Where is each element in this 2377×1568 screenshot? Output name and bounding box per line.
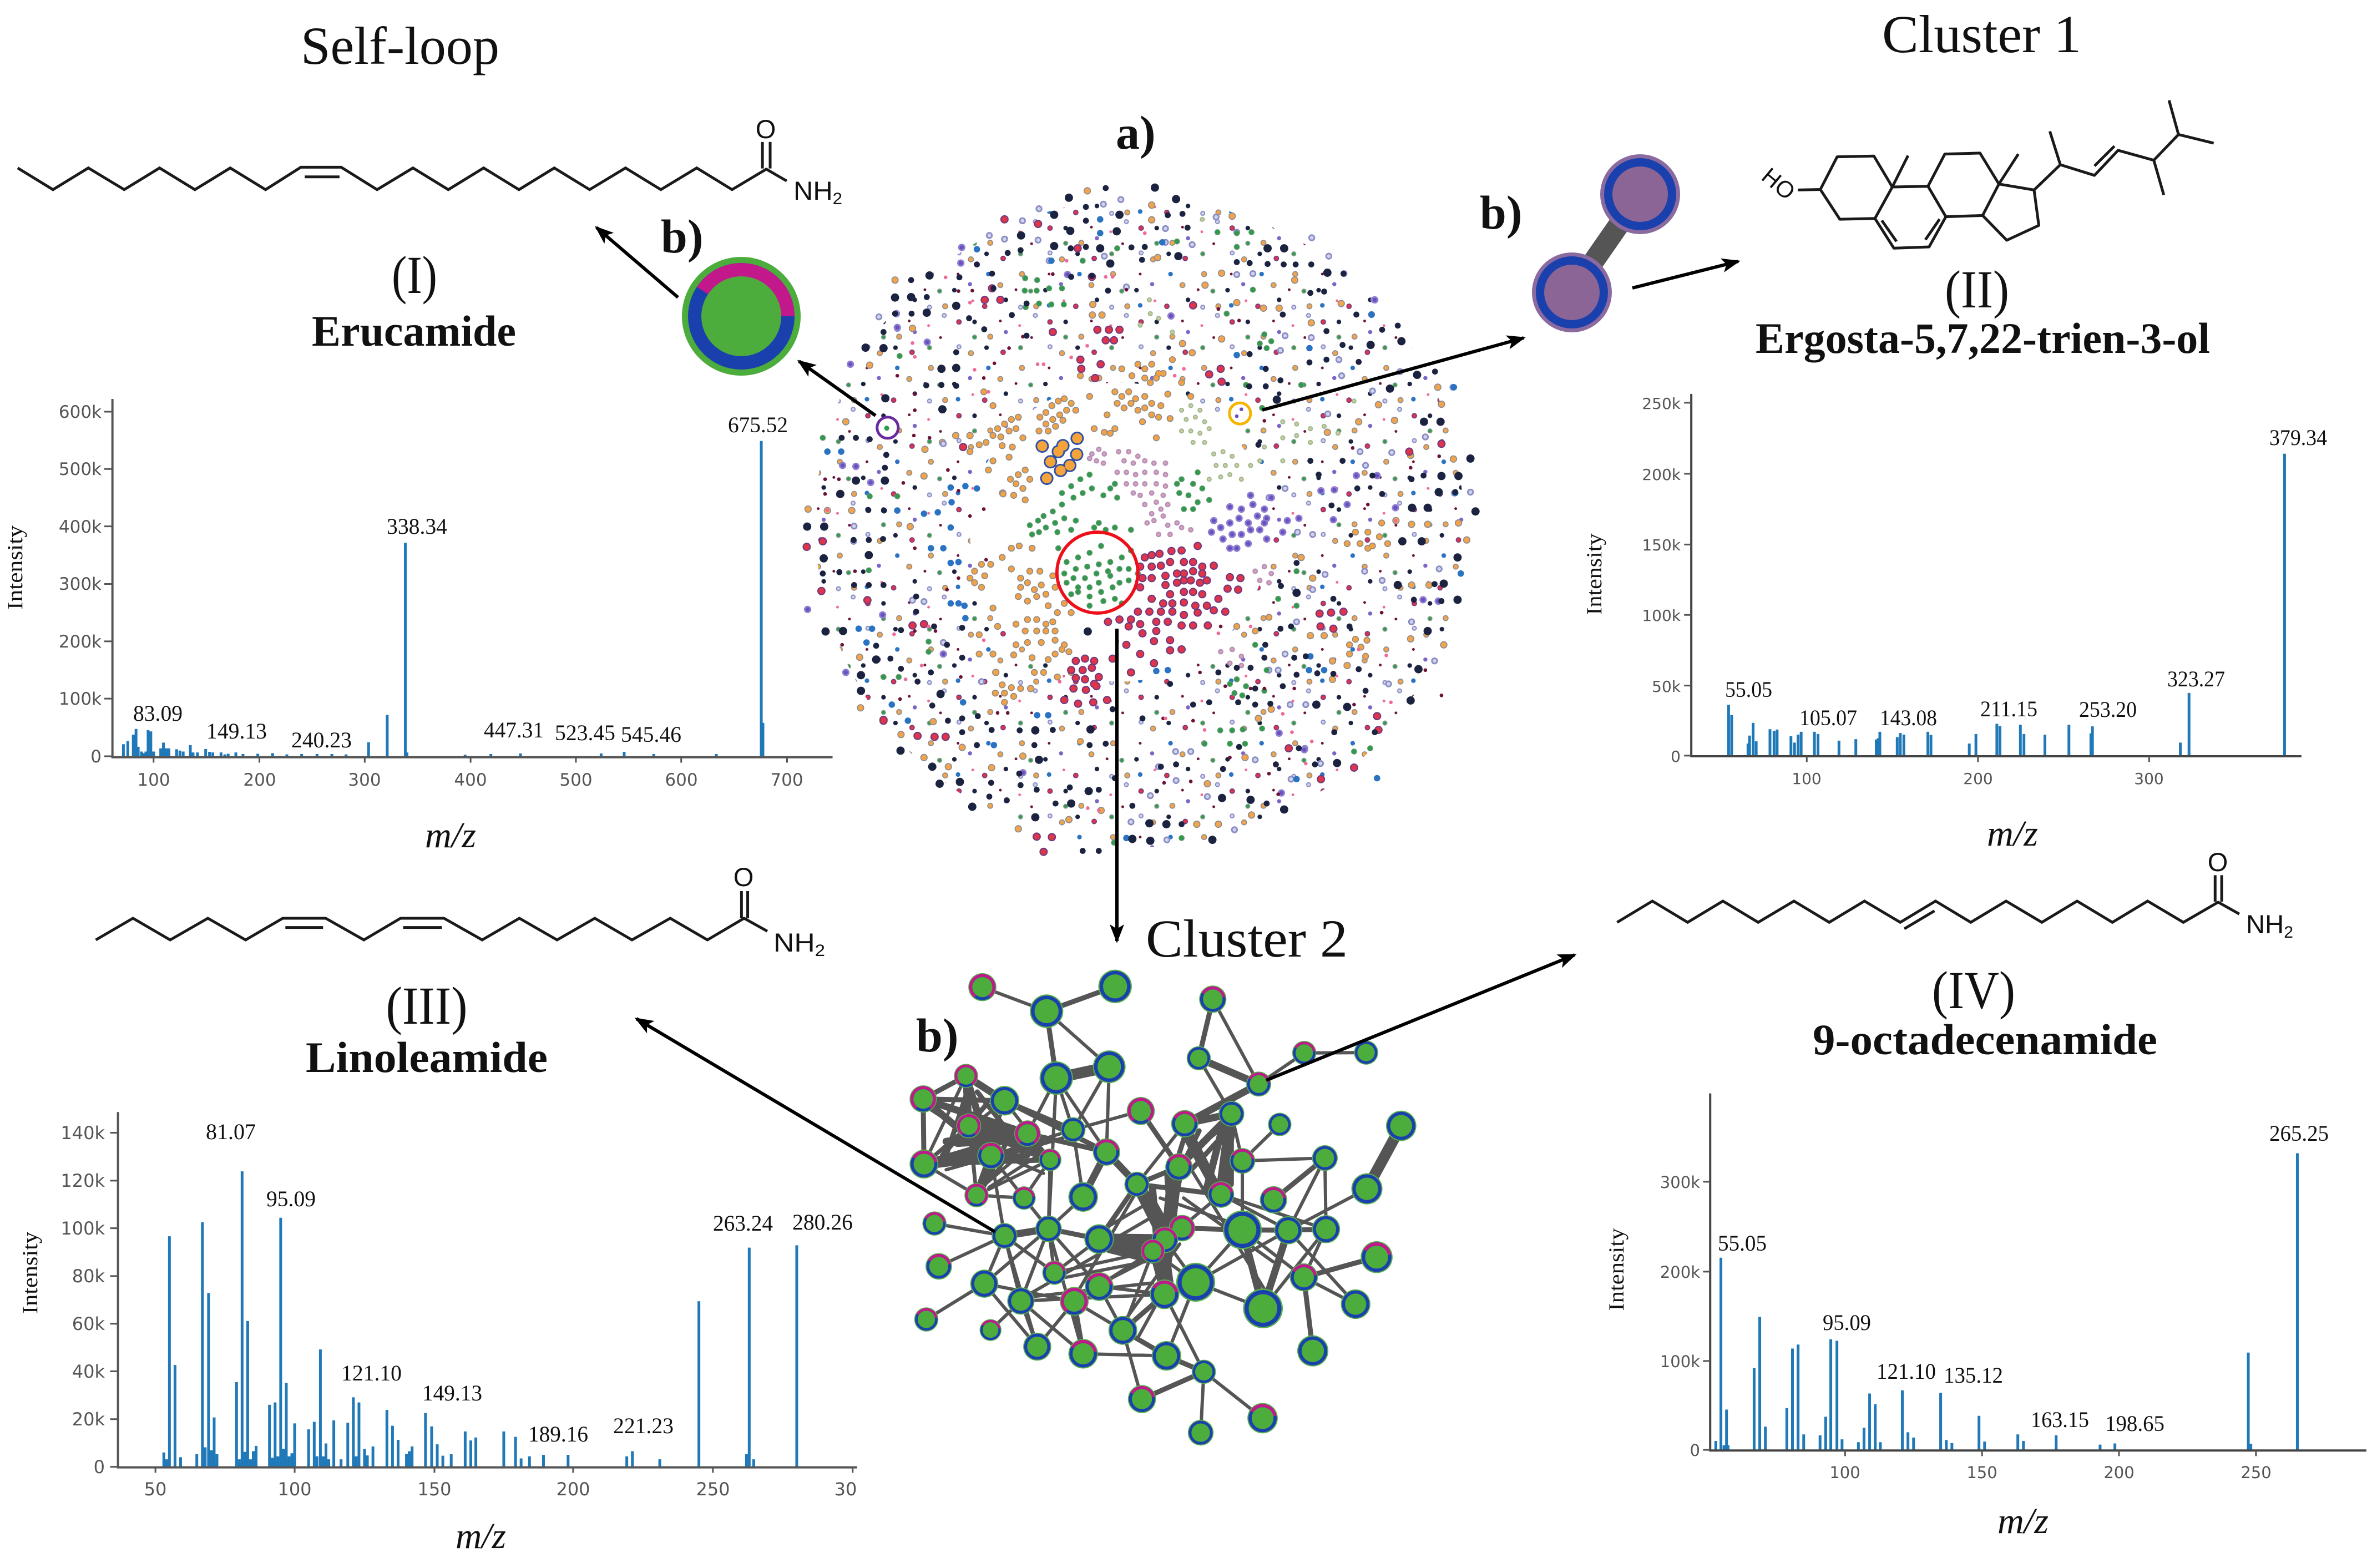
chart IV: 9-octadecenamide spectrum: 265.25	[2269, 1121, 2329, 1146]
chart II: ergosta spectrum: 105.07	[1799, 705, 1857, 730]
chart II: ergosta spectrum: 253.20	[2079, 697, 2137, 722]
chart I: erucamide spectrum: 400k	[59, 517, 102, 537]
molecule I: erucamide structure: 2	[833, 190, 842, 208]
node pair: cluster 1 enlarged	[1532, 154, 1680, 332]
chart II: ergosta spectrum: 50k	[1652, 677, 1681, 696]
molecule I: erucamide structure	[18, 114, 842, 208]
arrow: cluster 1 pair to ergosta	[1632, 261, 1738, 288]
label b) cluster 1: b)	[1480, 186, 1522, 239]
chart III: linoleamide spectrum: 120k	[60, 1170, 105, 1191]
chart II: ergosta spectrum: 0	[1671, 747, 1681, 766]
chart I: erucamide spectrum: 447.31	[484, 717, 544, 742]
chart IV: 9-octadecenamide spectrum: 100k	[1660, 1352, 1700, 1371]
chart III: linoleamide spectrum: 140k	[60, 1122, 105, 1144]
heading: Cluster 2: Cluster 2	[1146, 909, 1348, 968]
chart IV: 9-octadecenamide spectrum: 200k	[1660, 1263, 1700, 1282]
chart II: ergosta spectrum: 200	[1963, 770, 1993, 788]
compound number I: (I)	[392, 245, 437, 305]
compound number II: (II)	[1945, 260, 2009, 319]
chart I: erucamide spectrum: 400	[454, 770, 487, 790]
chart III: linoleamide spectrum: 40k	[72, 1361, 105, 1382]
chart I: erucamide spectrum: 523.45	[555, 720, 615, 745]
chart IV: 9-octadecenamide spectrum: m/z	[1997, 1501, 2049, 1541]
chart III: linoleamide spectrum: 263.24	[713, 1211, 773, 1236]
chart IV: 9-octadecenamide spectrum: Intensity	[1605, 1228, 1629, 1311]
chart I: erucamide spectrum: m/z	[425, 815, 476, 856]
molecule IV: 9-octadecenamide structure	[1617, 847, 2293, 942]
large orange nodes	[1042, 438, 1077, 478]
chart II: ergosta spectrum: 143.08	[1880, 705, 1937, 730]
chart III: linoleamide spectrum: 30	[835, 1479, 857, 1500]
chart IV: 9-octadecenamide spectrum: 55.05	[1718, 1231, 1767, 1256]
chart II: ergosta spectrum: 211.15	[1980, 696, 2037, 721]
chart III: linoleamide spectrum: 100	[277, 1479, 312, 1500]
molecule I: erucamide structure: NH	[793, 176, 831, 205]
navy large nodes	[807, 188, 1475, 841]
chart IV: 9-octadecenamide spectrum: 95.09	[1823, 1310, 1871, 1335]
chart IV: 9-octadecenamide spectrum: 300k	[1660, 1173, 1700, 1192]
chart I: erucamide spectrum: 500k	[59, 459, 102, 479]
chart I: erucamide spectrum: Intensity	[3, 525, 27, 610]
chart II: ergosta spectrum	[1582, 394, 2327, 854]
navy medium nodes	[823, 188, 1455, 851]
chart I: erucamide spectrum: 675.52	[728, 412, 788, 437]
arrow: highlighted dot to self-loop node	[799, 361, 876, 416]
chart I: erucamide spectrum: 100	[137, 770, 170, 790]
chart IV: 9-octadecenamide spectrum: 163.15	[2031, 1407, 2089, 1432]
chart II: ergosta spectrum: 150k	[1642, 536, 1681, 554]
chart I: erucamide spectrum: 149.13	[206, 719, 267, 743]
chart III: linoleamide spectrum: 280.26	[792, 1210, 853, 1235]
label b) cluster 2: b)	[916, 1009, 958, 1062]
chart I: erucamide spectrum: 338.34	[387, 514, 447, 539]
chart IV: 9-octadecenamide spectrum: 100	[1829, 1463, 1860, 1482]
chart IV: 9-octadecenamide spectrum: 200	[2103, 1463, 2135, 1482]
chart IV: 9-octadecenamide spectrum: 198.65	[2105, 1411, 2164, 1436]
highlight: cluster 2 red circle	[1057, 532, 1138, 613]
arrow: red circle down to cluster 2	[1115, 629, 1119, 941]
compound number IV: (IV)	[1932, 960, 2015, 1020]
chart II: ergosta spectrum: 300	[2134, 770, 2164, 788]
arrow: cluster 2 node to linoleamide	[636, 1019, 995, 1232]
chart III: linoleamide spectrum: 200	[556, 1479, 590, 1500]
chart III: linoleamide spectrum: 60k	[72, 1313, 105, 1334]
chart I: erucamide spectrum: 200	[243, 770, 276, 790]
chart I: erucamide spectrum: 700	[770, 770, 803, 790]
label b) self-loop: b)	[661, 210, 703, 263]
chart III: linoleamide spectrum: Intensity	[18, 1231, 42, 1314]
highlight: self-loop node ring	[877, 417, 898, 438]
arrow: self-loop node to erucamide	[596, 227, 678, 297]
chart III: linoleamide spectrum: 50	[144, 1479, 166, 1500]
compound name 9-octadecenamide: 9-octadecenamide	[1813, 1015, 2157, 1064]
chart III: linoleamide spectrum	[18, 1112, 857, 1556]
chart II: ergosta spectrum: 323.27	[2167, 666, 2225, 691]
panel a: molecular network disk of nodes	[802, 183, 1480, 856]
chart II: ergosta spectrum: Intensity	[1582, 533, 1606, 615]
chart I: erucamide spectrum: 545.46	[621, 722, 681, 747]
chart III: linoleamide spectrum: 0	[94, 1456, 105, 1478]
chart III: linoleamide spectrum: 100k	[60, 1218, 105, 1239]
node: self-loop enlarged	[682, 257, 801, 376]
chart II: ergosta spectrum: 250k	[1642, 394, 1681, 413]
molecule IV: 9-octadecenamide structure: O	[2208, 847, 2228, 877]
highlight: cluster 1 ring	[1230, 403, 1251, 424]
arrow: cluster 2 node to 9-octadecenamide	[1266, 955, 1575, 1080]
heading: Self-loop: Self-loop	[301, 16, 499, 75]
molecule IV: 9-octadecenamide structure: NH	[2246, 909, 2284, 939]
chart III: linoleamide spectrum: 121.10	[341, 1360, 402, 1385]
chart III: linoleamide spectrum: m/z	[456, 1516, 506, 1556]
arrow: highlighted dot to cluster 1 pair	[1262, 338, 1524, 410]
chart I: erucamide spectrum: 83.09	[133, 701, 183, 726]
molecule II: ergosta structure: HO	[1757, 163, 1801, 205]
molecule III: linoleamide structure: 2	[815, 942, 825, 960]
molecule III: linoleamide structure: O	[734, 862, 753, 892]
chart III: linoleamide spectrum: 80k	[72, 1266, 105, 1287]
compound name Linoleamide: Linoleamide	[306, 1033, 548, 1081]
chart IV: 9-octadecenamide spectrum: 121.10	[1877, 1359, 1936, 1384]
chart III: linoleamide spectrum: 20k	[72, 1409, 105, 1430]
chart I: erucamide spectrum: 300	[348, 770, 381, 790]
heading: Cluster 1: Cluster 1	[1882, 4, 2081, 64]
chart I: erucamide spectrum: 300k	[59, 574, 102, 594]
chart IV: 9-octadecenamide spectrum	[1605, 1094, 2366, 1541]
chart II: ergosta spectrum: 200k	[1642, 466, 1681, 484]
molecule II: ergosta structure	[1757, 100, 2214, 248]
panel b: cluster 2 network	[909, 970, 1417, 1445]
chart IV: 9-octadecenamide spectrum: 0	[1690, 1441, 1700, 1460]
chart IV: 9-octadecenamide spectrum: 250	[2241, 1463, 2272, 1482]
network nodes	[909, 970, 1417, 1445]
chart I: erucamide spectrum: 240.23	[291, 727, 352, 752]
chart II: ergosta spectrum: 100	[1792, 770, 1822, 788]
chart I: erucamide spectrum: 200k	[59, 632, 102, 652]
molecule III: linoleamide structure	[96, 862, 825, 960]
network edges	[923, 987, 1401, 1433]
molecule IV: 9-octadecenamide structure: 2	[2284, 923, 2293, 942]
chart II: ergosta spectrum: m/z	[1987, 813, 2038, 854]
compound name Ergosta: Ergosta-5,7,22-trien-3-ol	[1756, 314, 2210, 362]
label a): a)	[1116, 106, 1156, 159]
molecule I: erucamide structure: O	[756, 114, 776, 144]
compound number III: (III)	[386, 976, 467, 1035]
chart I: erucamide spectrum: 500	[559, 770, 593, 790]
chart I: erucamide spectrum	[3, 399, 833, 856]
chart III: linoleamide spectrum: 250	[696, 1479, 730, 1500]
compound name Erucamide: Erucamide	[312, 307, 516, 355]
chart IV: 9-octadecenamide spectrum: 150	[1966, 1463, 1997, 1482]
chart II: ergosta spectrum: 379.34	[2269, 425, 2327, 450]
chart III: linoleamide spectrum: 149.13	[422, 1380, 482, 1405]
chart III: linoleamide spectrum: 95.09	[266, 1186, 316, 1211]
chart III: linoleamide spectrum: 150	[417, 1479, 452, 1500]
chart I: erucamide spectrum: 0	[90, 747, 102, 767]
chart I: erucamide spectrum: 600k	[59, 402, 102, 422]
chart II: ergosta spectrum: 100k	[1642, 606, 1681, 625]
chart IV: 9-octadecenamide spectrum: 135.12	[1944, 1363, 2003, 1388]
chart III: linoleamide spectrum: 189.16	[528, 1422, 588, 1446]
chart III: linoleamide spectrum: 221.23	[613, 1413, 674, 1438]
chart III: linoleamide spectrum: 81.07	[206, 1119, 256, 1144]
molecule III: linoleamide structure: NH	[773, 928, 811, 957]
chart I: erucamide spectrum: 100k	[59, 689, 102, 709]
chart II: ergosta spectrum: 55.05	[1725, 677, 1772, 702]
chart I: erucamide spectrum: 600	[665, 770, 698, 790]
